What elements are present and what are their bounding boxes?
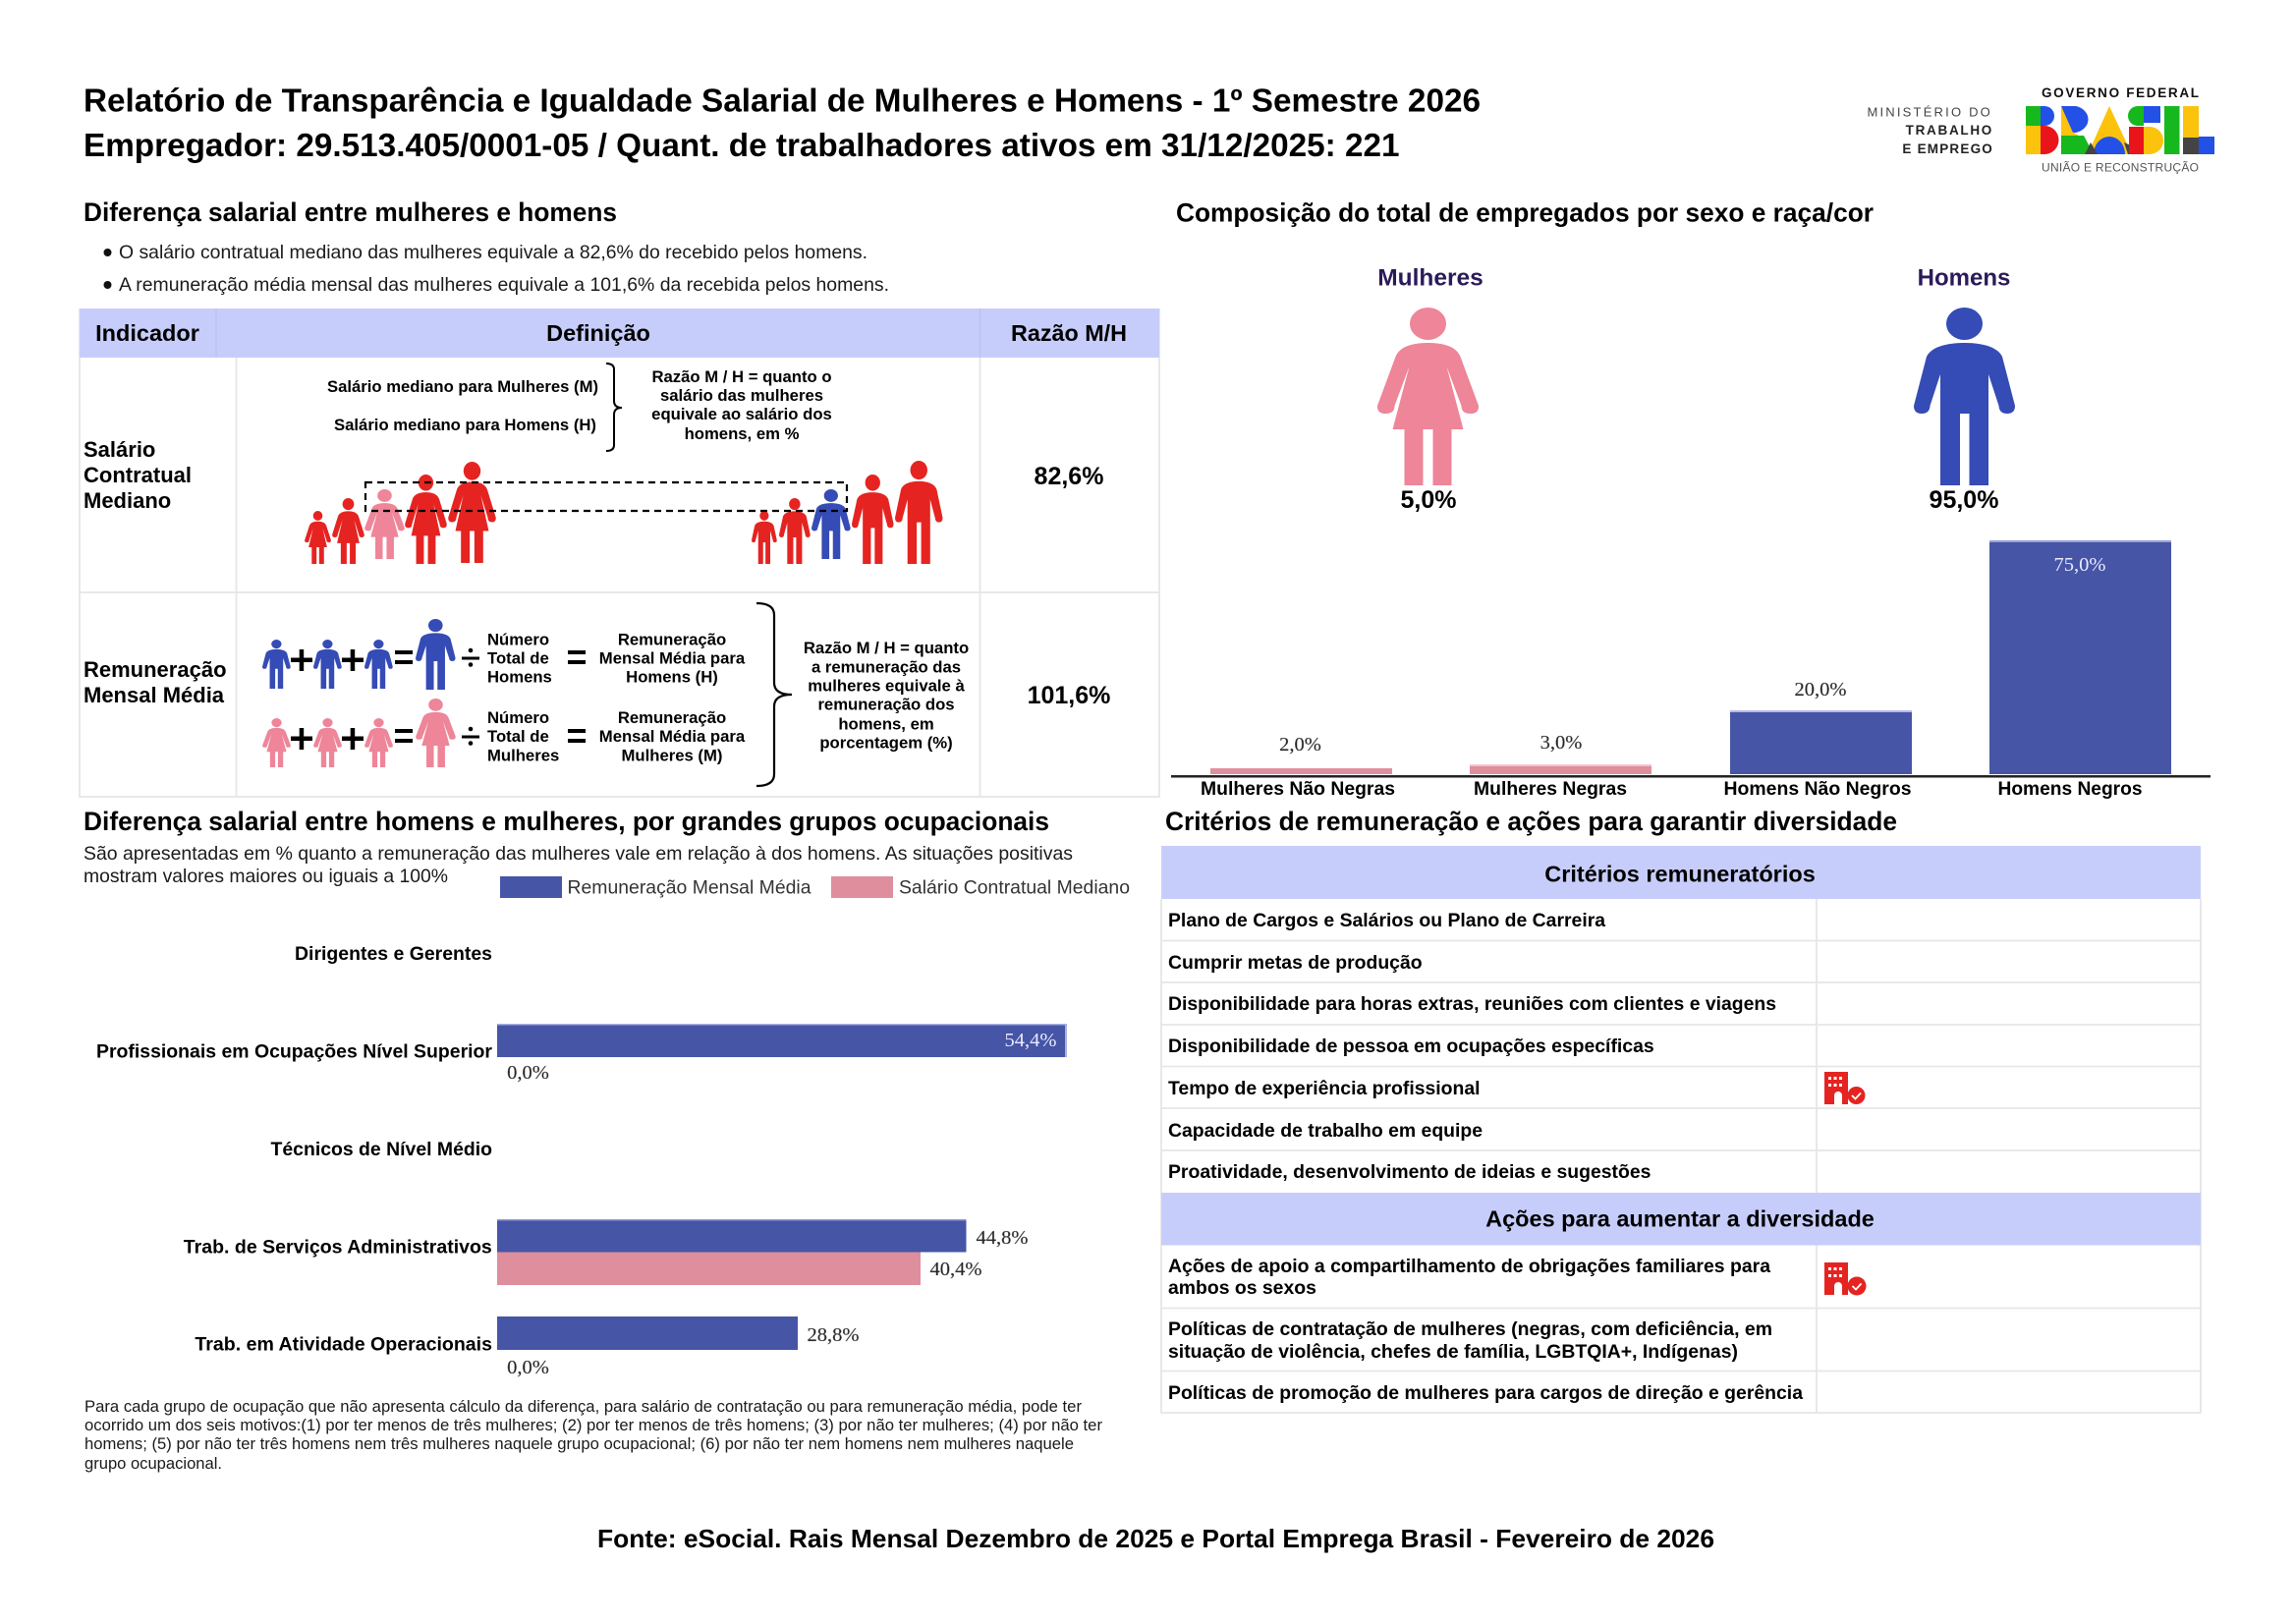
equação: homens: Remuneração — [618, 631, 726, 648]
list: ações: Políticas de promoção de mulheres para cargos de direção e gerência — [1168, 1382, 1803, 1404]
equação: mulheres: Mensal Média para — [599, 727, 746, 746]
row: remuneração mensal média: homens, em — [838, 715, 934, 733]
bar chart: grupos ocupacionais: 28,8% — [808, 1324, 859, 1346]
icon group: homens 95,0% — [1914, 265, 2015, 514]
pictogram: homens ordenados por salário — [752, 461, 943, 564]
icon group: homens 95,0%: 95,0% — [1930, 486, 1998, 514]
list: critérios: Disponibilidade para horas extras, reuniões com clientes e viagens — [1168, 993, 1776, 1015]
icon: empresa marcada (compartilhamento de obrigações) — [1824, 1262, 1867, 1295]
row: remuneração mensal média: Razão M / H = quanto — [804, 639, 969, 657]
row: remuneração mensal média: Remuneração — [84, 657, 227, 682]
row: remuneração mensal média: Mensal Média — [84, 683, 225, 707]
icon: empresa marcada (tempo de experiência) — [1824, 1072, 1865, 1104]
list: critérios: Plano de Cargos e Salários ou Plano de Carreira — [1168, 910, 1605, 931]
table header: Definição — [546, 320, 650, 346]
legend: Salário Contratual Mediano — [899, 876, 1130, 898]
header: ações para aumentar a diversidade: Ações para aumentar a diversidade — [1485, 1206, 1875, 1232]
bar chart: composição por sexo e raça/cor: Mulheres Negras — [1474, 779, 1627, 800]
header: ações para aumentar a diversidade — [1161, 1193, 2201, 1246]
equação: homens: Total de — [487, 648, 549, 668]
bar chart: composição por sexo e raça/cor: Homens Não Negros — [1723, 779, 1912, 800]
list: ações: Ações de apoio a compartilhamento de obrigações familiares para — [1168, 1256, 1770, 1277]
heading: diferença salarial: Diferença salarial entre mulheres e homens — [84, 197, 617, 227]
row: remuneração mensal média: 101,6% — [1028, 682, 1110, 709]
heading: diferença por grupos ocupacionais: Diferença salarial entre homens e mulheres, por grandes grupos ocupacionais — [84, 807, 1049, 836]
footnote: grupo ocupacional. — [84, 1454, 222, 1473]
list: critérios: Cumprir metas de produção — [1168, 952, 1423, 974]
logo: ministério e governo federal — [1867, 85, 2214, 175]
list: ações: Políticas de contratação de mulheres (negras, com deficiência, em — [1168, 1318, 1772, 1340]
title: Empregador: 29.513.405/0001-05 / Quant. de trabalhadores ativos em 31/12/2025: 221 — [84, 128, 1399, 164]
bullet list: A remuneração média mensal das mulheres equivale a 101,6% da recebida pelos homens. — [119, 274, 889, 296]
row: salário contratual mediano: Razão M / H = quanto o — [651, 367, 832, 386]
header: critérios remuneratórios — [1161, 846, 2201, 899]
logo: ministério e governo federal: E EMPREGO — [1902, 141, 1993, 156]
title: Relatório de Transparência e Igualdade Salarial de Mulheres e Homens - 1º Semestre 2026 — [84, 83, 1481, 120]
logo: ministério e governo federal: UNIÃO E RECONSTRUÇÃO — [2042, 161, 2199, 175]
table header: Razão M/H — [1011, 320, 1127, 346]
row: remuneração mensal média: remuneração dos — [817, 696, 955, 713]
list: critérios: Tempo de experiência profissional — [1168, 1078, 1481, 1099]
row: remuneração mensal média — [84, 603, 1110, 786]
list: critérios: Disponibilidade de pessoa em ocupações específicas — [1168, 1036, 1654, 1057]
footnote — [84, 1397, 1102, 1473]
bar chart: composição por sexo e raça/cor: Homens Negros — [1998, 779, 2142, 800]
row: salário contratual mediano: salário das mulheres — [660, 386, 823, 405]
equação: homens: Mensal Média para — [599, 648, 746, 668]
bar chart: grupos ocupacionais: 40,4% — [930, 1259, 981, 1280]
table header: Indicador — [95, 320, 199, 346]
equação: mulheres: Remuneração — [618, 708, 726, 727]
bar chart: composição por sexo e raça/cor: Mulheres Não Negras — [1201, 779, 1395, 800]
equação: mulheres: Total de — [487, 727, 549, 746]
row: salário contratual mediano: equivale ao salário dos — [651, 405, 832, 423]
bar chart: grupos ocupacionais: Trab. de Serviços Administrativos — [184, 1236, 492, 1258]
icon group: homens 95,0%: Homens — [1918, 265, 2010, 291]
bar chart: composição por sexo e raça/cor: 20,0% — [1795, 679, 1846, 700]
chart description — [84, 843, 1073, 887]
icon group: mulheres 5,0%: 5,0% — [1401, 486, 1456, 514]
chart description: São apresentadas em % quanto a remuneração das mulheres vale em relação à dos homens. As situações positivas — [84, 843, 1073, 865]
row: salário contratual mediano: Contratual — [84, 463, 192, 487]
list: ações — [1168, 1256, 1803, 1404]
bar chart: composição por sexo e raça/cor: 2,0% — [1279, 734, 1321, 756]
table header — [79, 308, 1159, 358]
row: salário contratual mediano: Salário — [84, 437, 155, 462]
logo: ministério e governo federal: TRABALHO — [1906, 123, 1993, 138]
bar chart: composição por sexo e raça/cor: 75,0% — [2054, 554, 2105, 576]
heading: critérios: Critérios de remuneração e ações para garantir diversidade — [1165, 807, 1897, 836]
pictogram: mulheres ordenadas por salário — [305, 462, 496, 564]
header: critérios remuneratórios: Critérios remuneratórios — [1544, 861, 1816, 886]
bar chart: grupos ocupacionais: Técnicos de Nível Médio — [271, 1139, 492, 1160]
bar chart: grupos ocupacionais: 0,0% — [507, 1062, 549, 1084]
list: ações: ambos os sexos — [1168, 1277, 1316, 1299]
footnote: homens; (5) por não ter três homens nem três mulheres naquele grupo ocupacional; (6) por não ter nem homens nem mulheres naquele — [84, 1434, 1074, 1453]
logo: ministério e governo federal: GOVERNO FEDERAL — [2042, 85, 2199, 100]
equação: mulheres: Número — [487, 708, 549, 727]
title — [84, 83, 1481, 164]
bar chart: grupos ocupacionais: Trab. em Atividade Operacionais — [195, 1334, 492, 1356]
bar chart: grupos ocupacionais: Dirigentes e Gerentes — [295, 943, 492, 965]
bar chart: grupos ocupacionais: Profissionais em Ocupações Nível Superior — [96, 1041, 492, 1063]
bar chart: grupos ocupacionais: 44,8% — [977, 1227, 1028, 1249]
equação: mulheres: Mulheres (M) — [622, 747, 722, 764]
row: salário contratual mediano — [84, 364, 1103, 564]
row: remuneração mensal média: mulheres equivale à — [808, 676, 965, 696]
row: salário contratual mediano: Salário mediano para Homens (H) — [334, 416, 596, 434]
equação: homens: Homens (H) — [626, 668, 718, 686]
panel: tabela de indicadores — [79, 308, 1159, 797]
equação: homens — [262, 619, 746, 690]
footnote: ocorrido um dos seis motivos:(1) por ter menos de três mulheres; (2) por ter menos de três homens; (3) por não ter mulheres; (4) por não ter — [84, 1416, 1102, 1434]
heading: composição: Composição do total de empregados por sexo e raça/cor — [1176, 198, 1874, 228]
list: ações: situação de violência, chefes de família, LGBTQIA+, Indígenas) — [1168, 1341, 1738, 1363]
chart description: mostram valores maiores ou iguais a 100% — [84, 866, 448, 887]
list: critérios: Capacidade de trabalho em equipe — [1168, 1120, 1483, 1142]
logo: ministério e governo federal: MINISTÉRIO DO — [1867, 104, 1992, 120]
bar chart: grupos ocupacionais: 54,4% — [1005, 1030, 1056, 1051]
equação: homens: Número — [487, 631, 549, 648]
legend: Remuneração Mensal Média — [568, 876, 812, 898]
equação: mulheres: Mulheres — [487, 747, 559, 764]
bullet list — [104, 242, 889, 296]
equação: homens: Homens — [487, 668, 552, 686]
icon group: mulheres 5,0% — [1377, 265, 1483, 514]
row: salário contratual mediano: homens, em % — [685, 424, 800, 443]
equação: mulheres — [262, 699, 746, 767]
footnote: Para cada grupo de ocupação que não apresenta cálculo da diferença, para salário de contratação ou para remuneração média, pode ter — [84, 1397, 1082, 1416]
legend — [500, 876, 1130, 898]
footer source: Fonte: eSocial. Rais Mensal Dezembro de 2025 e Portal Emprega Brasil - Fevereiro de 2026 — [597, 1524, 1714, 1553]
bar chart: composição por sexo e raça/cor: 3,0% — [1540, 732, 1582, 754]
icon group: mulheres 5,0%: Mulheres — [1377, 265, 1483, 291]
bar chart: grupos ocupacionais — [96, 943, 1067, 1378]
row: remuneração mensal média: a remuneração das — [812, 658, 961, 676]
bar chart: grupos ocupacionais: 0,0% — [507, 1357, 549, 1378]
bar chart: composição por sexo e raça/cor — [1171, 540, 2211, 800]
bullet list: O salário contratual mediano das mulheres equivale a 82,6% do recebido pelos homens. — [119, 242, 868, 263]
row: salário contratual mediano: Mediano — [84, 488, 171, 513]
row: salário contratual mediano: Salário mediano para Mulheres (M) — [327, 377, 598, 396]
panel: critérios e ações — [1161, 846, 2201, 1413]
row: salário contratual mediano: 82,6% — [1035, 463, 1103, 490]
row: remuneração mensal média: porcentagem (%) — [819, 733, 953, 753]
list: critérios — [1168, 910, 1776, 1183]
list: critérios: Proatividade, desenvolvimento de ideias e sugestões — [1168, 1161, 1651, 1183]
